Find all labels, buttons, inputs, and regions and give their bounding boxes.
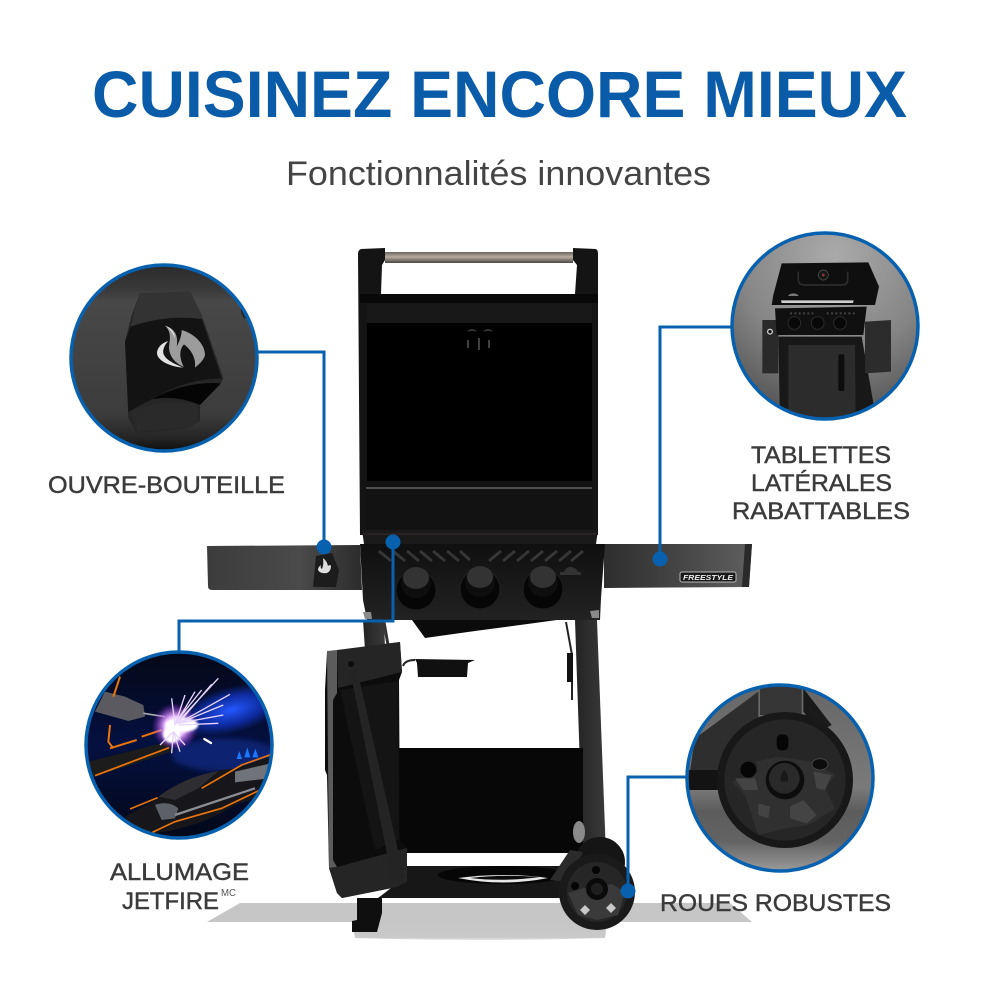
callout dots [316, 534, 668, 898]
wheel [550, 821, 635, 930]
label: side tables: TABLETTES [751, 442, 891, 469]
panel vents [379, 551, 583, 561]
cart foot [352, 898, 382, 932]
bottom shelf [378, 866, 590, 898]
back panel of cart [399, 748, 583, 853]
knob 1 [396, 567, 436, 610]
callout lines and dots [179, 327, 734, 891]
lid handle [385, 252, 573, 263]
label: side tables: RABATTABLES [732, 498, 910, 525]
circle: wheel [687, 685, 873, 871]
label: jetfire ignition: JETFIRE [122, 888, 219, 915]
line: wheels [628, 777, 689, 891]
knob 2 [460, 566, 500, 609]
line: side tables [660, 327, 734, 559]
floor shadow [207, 903, 752, 940]
label: jetfire ignition: MC [221, 888, 236, 899]
circle: jetfire ignition [85, 651, 292, 842]
left side shelf [207, 545, 362, 590]
logo [560, 567, 581, 575]
label: wheels: ROUES ROBUSTES [660, 890, 891, 917]
label: side tables: LATÉRALES [751, 470, 892, 497]
line: bottle opener [256, 352, 324, 547]
control panel [360, 544, 605, 620]
line: jetfire [179, 542, 393, 654]
freestyle badge: FREESTYLE [683, 573, 734, 582]
cart legs [363, 620, 606, 855]
circle: side tables grill [732, 233, 918, 422]
label: jetfire ignition: ALLUMAGE [110, 859, 249, 886]
grill illustration [207, 248, 752, 932]
subtitle: Fonctionnalités innovantes [286, 155, 711, 193]
title: CUISINEZ ENCORE MIEUX [92, 57, 907, 131]
label: side tables [732, 442, 910, 525]
label: bottle opener: OUVRE-BOUTEILLE [48, 472, 285, 499]
knob 3 [523, 566, 563, 609]
firebox under panel [412, 620, 557, 638]
grill lid and open interior [358, 248, 598, 544]
open cart door [325, 642, 407, 898]
tool tray [403, 659, 475, 677]
bottle opener on shelf [313, 553, 339, 587]
right side shelf [604, 544, 752, 588]
circle: bottle opener [70, 264, 258, 452]
label: jetfire ignition [110, 859, 249, 915]
